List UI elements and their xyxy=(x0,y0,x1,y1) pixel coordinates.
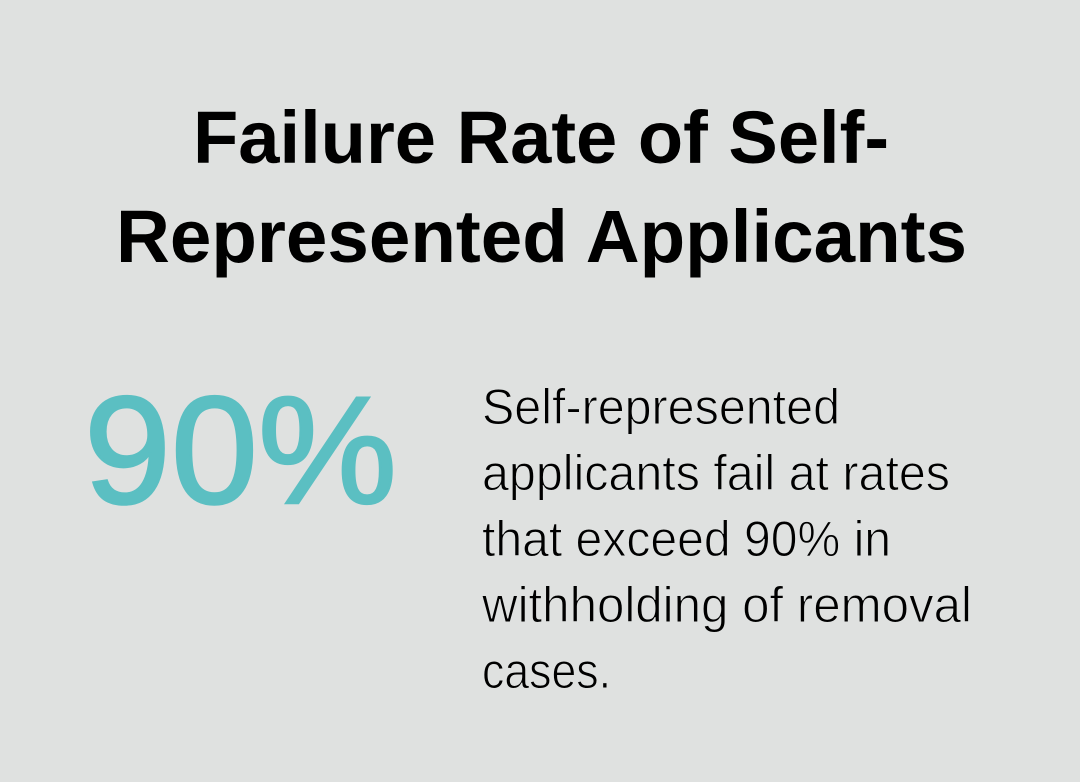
description text: Self-represented xyxy=(482,379,840,435)
description text: cases. xyxy=(482,643,611,699)
big statistic: 90%: 90% xyxy=(84,365,397,536)
description text: withholding of removal xyxy=(481,577,972,633)
title: Failure Rate of Self- xyxy=(193,96,889,179)
description text: applicants fail at rates xyxy=(482,445,950,501)
title: Represented Applicants xyxy=(116,195,967,278)
description text xyxy=(481,379,972,699)
title xyxy=(116,96,967,278)
description text: that exceed 90% in xyxy=(482,511,891,567)
